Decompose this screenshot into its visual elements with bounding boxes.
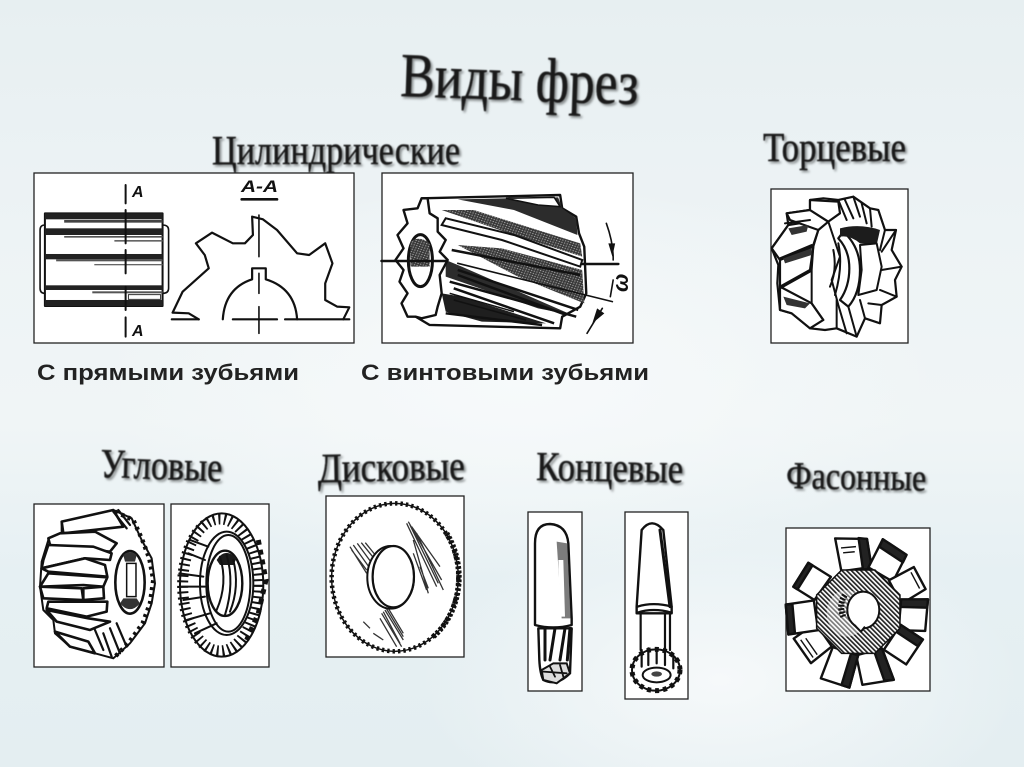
panel: straight teeth drawing	[34, 173, 354, 343]
heading: angular: Угловые	[100, 440, 223, 490]
title: Виды фрез	[400, 42, 640, 118]
panel: angular cutter two	[171, 504, 269, 667]
label: helical teeth: С винтовыми зубьями	[361, 360, 649, 385]
heading: disc: Дисковые	[317, 442, 465, 491]
panel: end mill one	[528, 512, 582, 691]
panel: helical teeth drawing	[381, 173, 633, 343]
heading: end: Концевые	[536, 443, 684, 492]
label: straight teeth: С прямыми зубьями	[37, 360, 299, 385]
panel: disc cutter	[326, 496, 464, 657]
omega angle mark: ω	[608, 274, 633, 292]
panel: end mill two	[625, 512, 688, 699]
heading: cylindrical: Цилиндрические	[212, 127, 460, 173]
heading: face: Торцевые	[763, 124, 906, 170]
panel: form cutter	[786, 528, 930, 691]
panel: angular cutter one	[34, 504, 164, 667]
section marks: A-A	[240, 177, 278, 196]
section marks: A	[131, 184, 144, 201]
heading: form: Фасонные	[786, 455, 927, 499]
panel: face mill	[771, 189, 908, 343]
section marks	[131, 177, 278, 340]
section marks: A	[131, 323, 144, 340]
